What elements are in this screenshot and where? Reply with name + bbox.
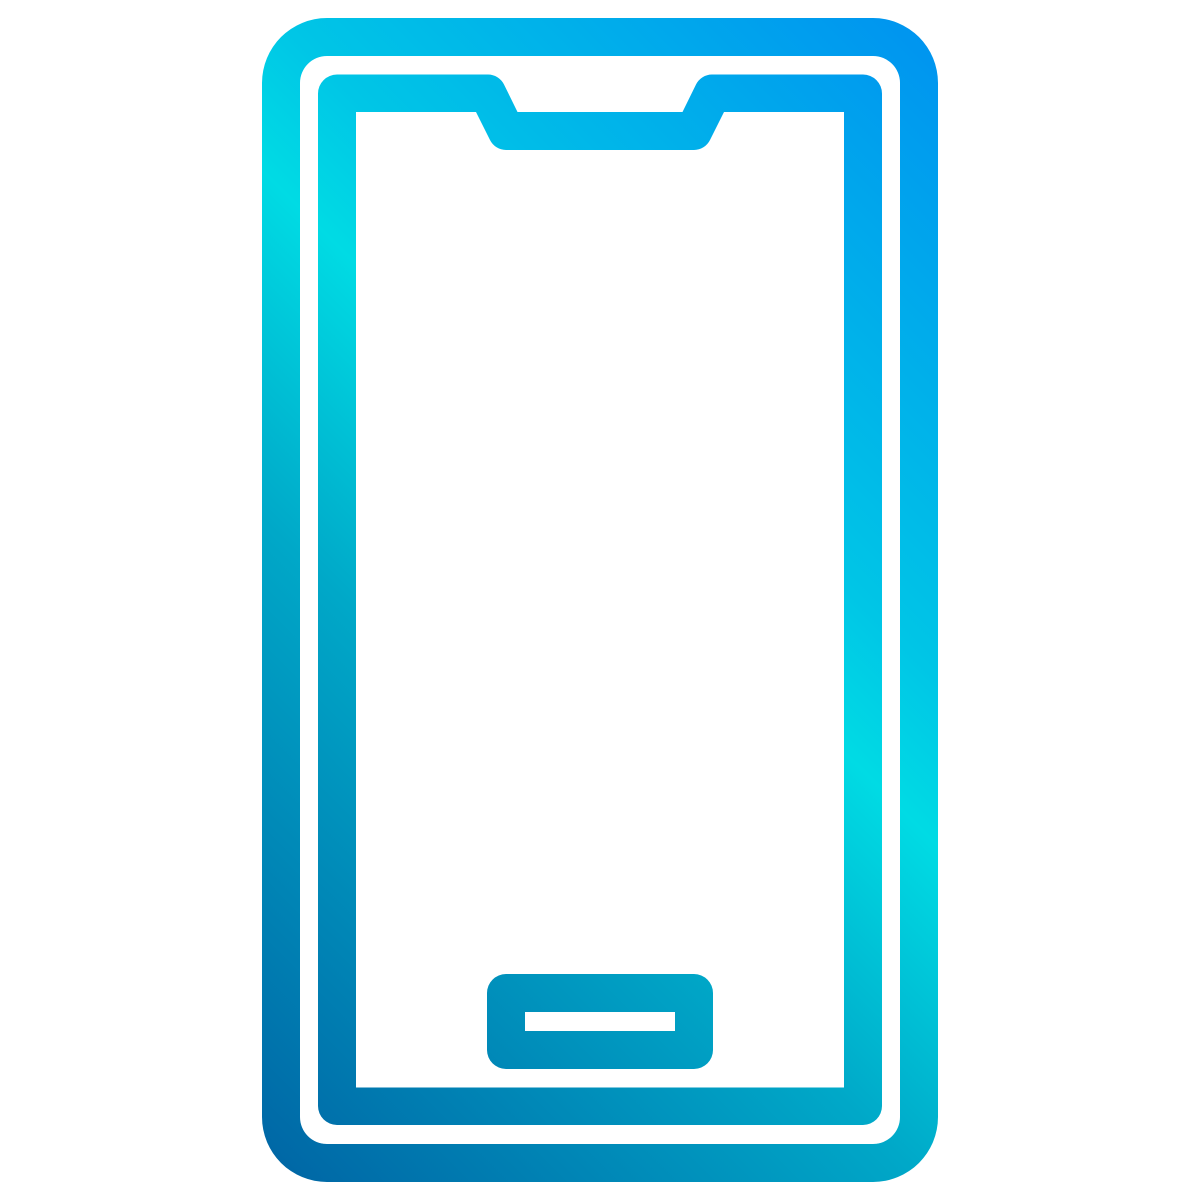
phone body outline (262, 18, 938, 1182)
home button (487, 974, 713, 1069)
screen frame with notch (318, 74, 882, 1125)
icon: smartphone (262, 18, 938, 1182)
